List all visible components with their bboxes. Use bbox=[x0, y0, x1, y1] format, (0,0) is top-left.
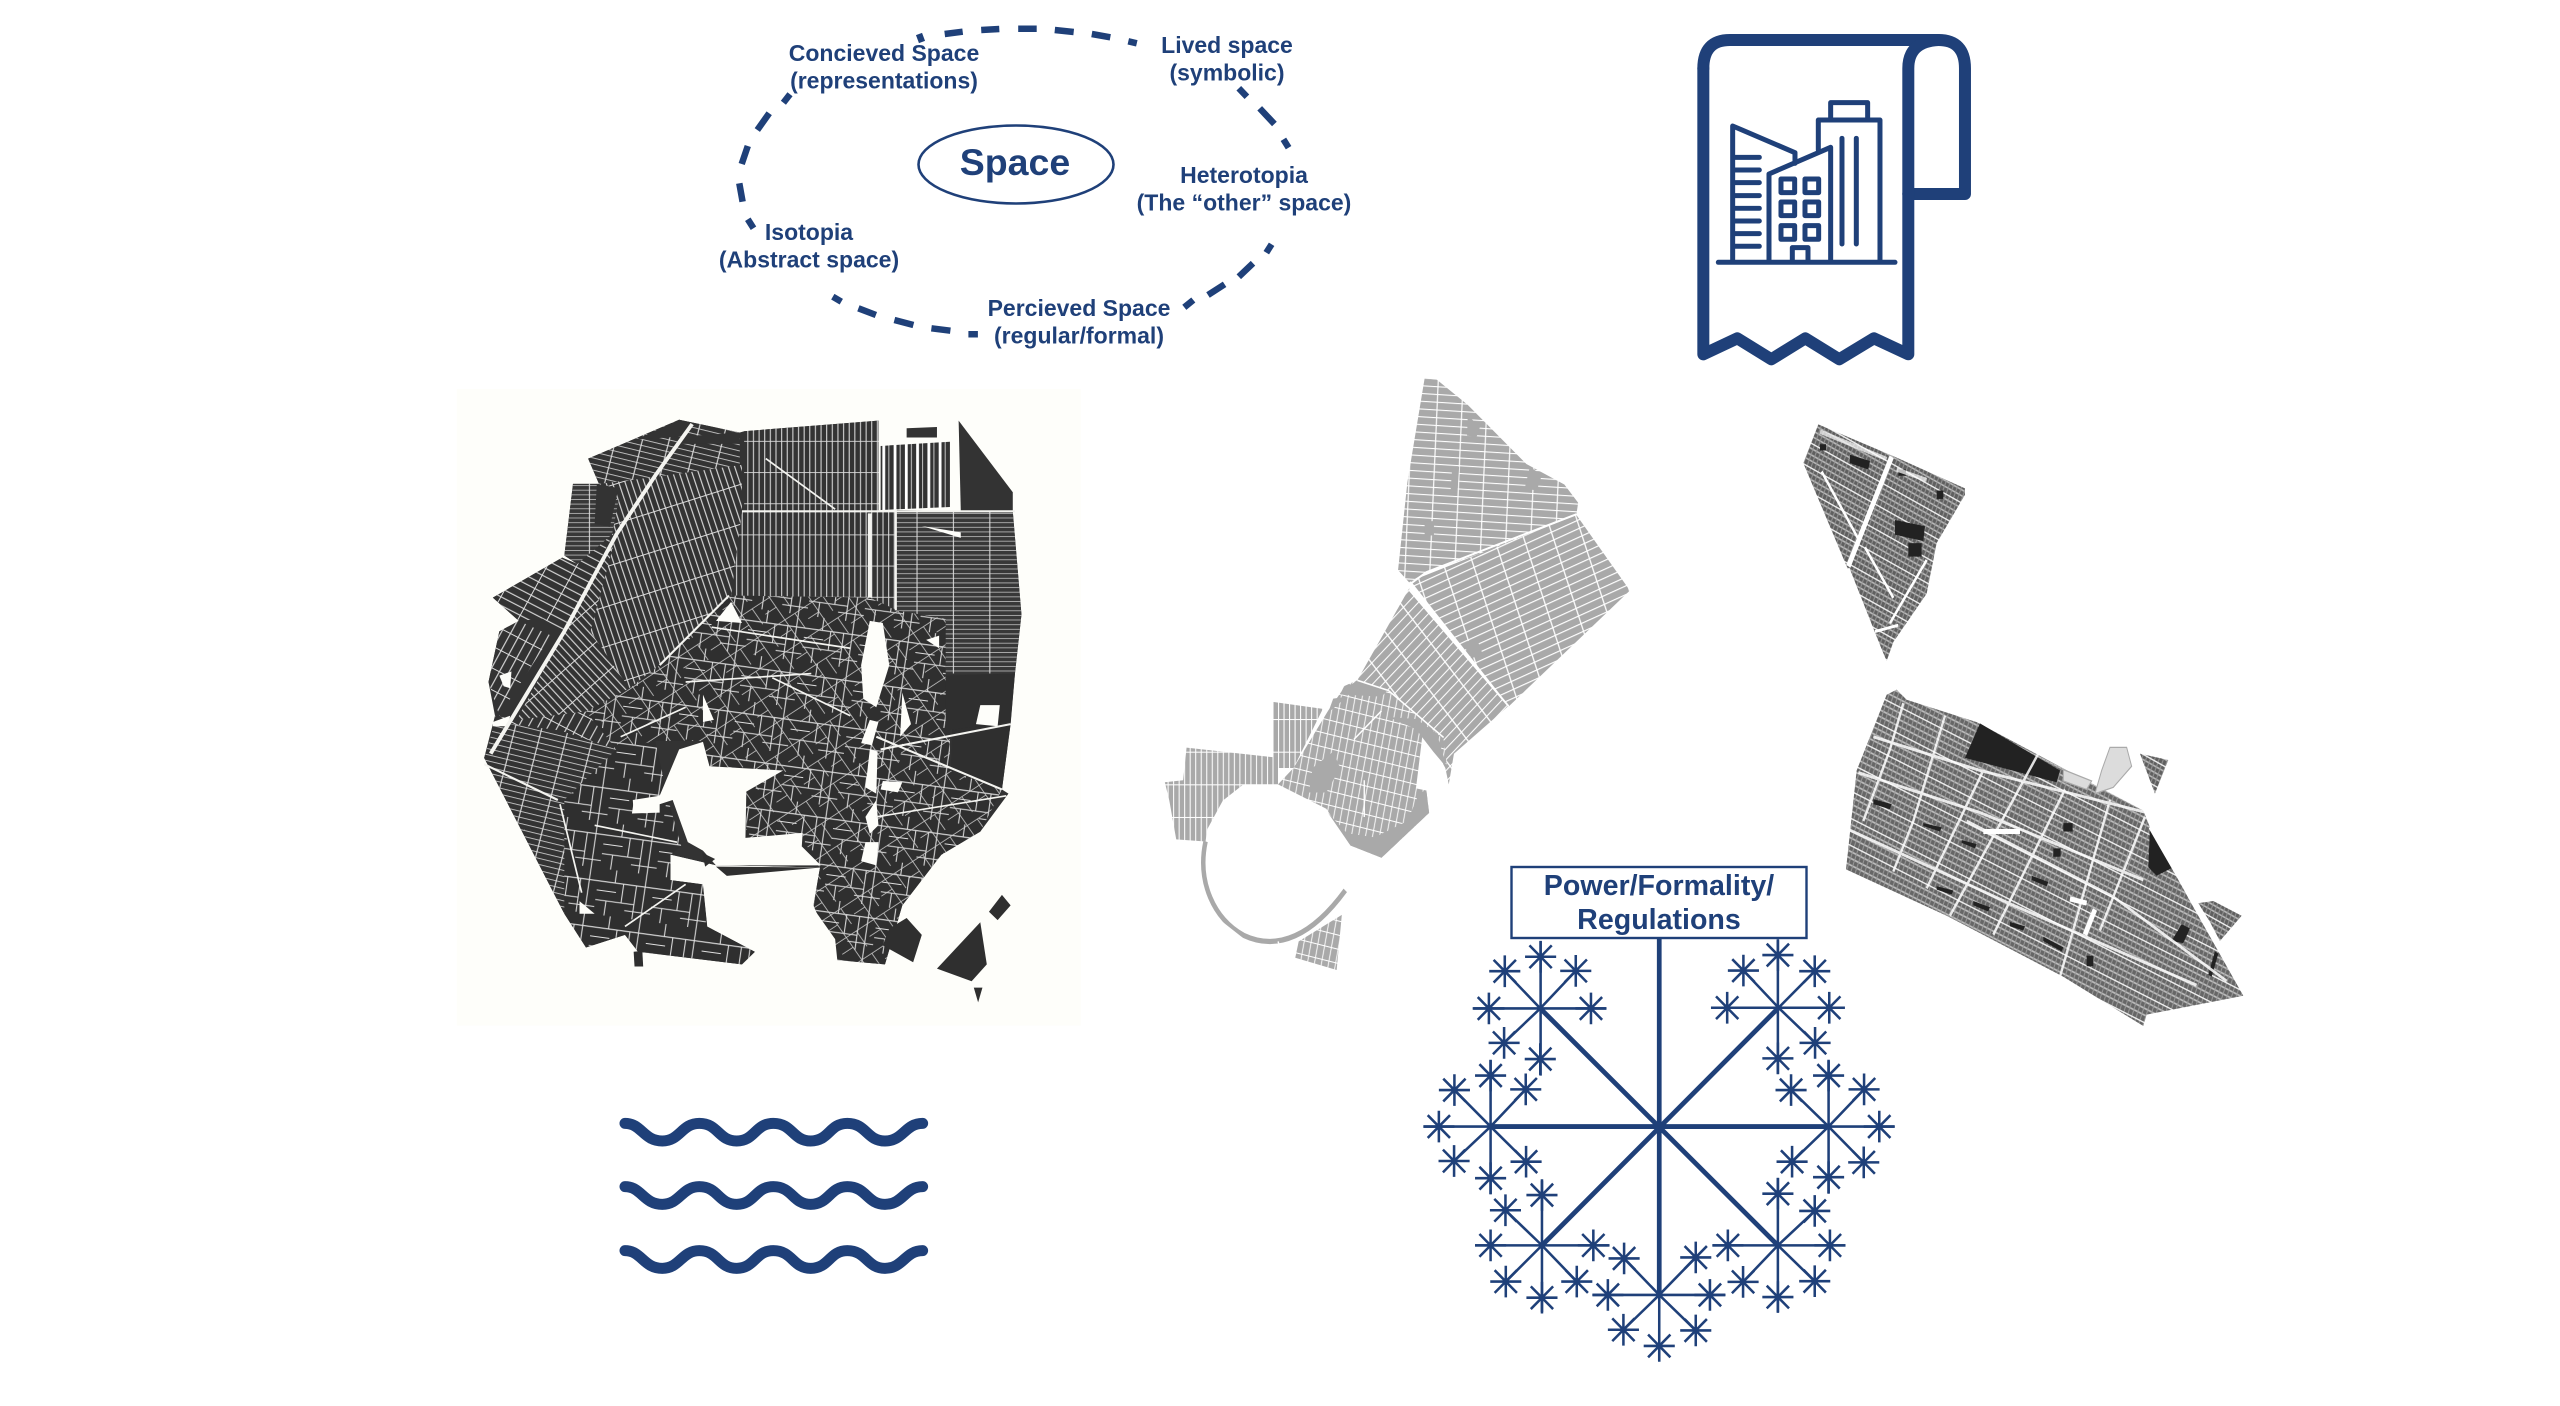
far west blocks bbox=[1165, 748, 1278, 841]
snowflake branches bbox=[1423, 938, 1895, 1362]
label: heterotopia: (The “other” space) bbox=[1137, 190, 1351, 216]
main roads bbox=[484, 424, 1015, 926]
heading box bbox=[1512, 867, 1806, 938]
map: dark figure-ground plan on cream panel bbox=[457, 389, 1081, 1026]
branch: upper left bbox=[1473, 941, 1607, 1076]
central ellipse: Space: Space bbox=[960, 141, 1070, 183]
branch: upper right bbox=[1711, 939, 1845, 1074]
label: lived space: Lived space bbox=[1161, 32, 1293, 58]
icon: water waves bbox=[625, 1123, 923, 1268]
label: isotopia: (Abstract space) bbox=[719, 246, 899, 272]
icon: scroll with city buildings bbox=[1703, 40, 1965, 359]
label: conceived space: (representations) bbox=[790, 68, 978, 94]
white road grid bbox=[1848, 703, 2227, 985]
branch: left bbox=[1423, 1060, 1542, 1194]
southern wedge bbox=[1295, 915, 1342, 970]
heading box: Power/Formality/ bbox=[1544, 870, 1774, 902]
boulevards bbox=[1354, 514, 1576, 817]
dark park bbox=[1965, 723, 2060, 782]
middle district bbox=[1411, 515, 1630, 706]
label: lived space: (symbolic) bbox=[1169, 60, 1285, 86]
heading box: Regulations bbox=[1577, 904, 1741, 936]
south district bbox=[1344, 588, 1508, 784]
central void bbox=[633, 742, 821, 865]
lake wedge bbox=[702, 853, 715, 867]
trunk spokes bbox=[1491, 938, 1829, 1295]
label: perceived space: Percieved Space bbox=[988, 295, 1170, 321]
causeway bar bbox=[716, 867, 821, 876]
branch: bottom bbox=[1592, 1242, 1725, 1362]
branch: lower left bbox=[1475, 1179, 1610, 1314]
detached east fragment bbox=[2198, 901, 2242, 941]
label: conceived space: Concieved Space bbox=[789, 40, 979, 66]
cream panel bbox=[457, 389, 1081, 1026]
city blocks bbox=[484, 420, 1021, 964]
branch: right bbox=[1776, 1060, 1895, 1194]
label: heterotopia: Heterotopia bbox=[1180, 162, 1308, 188]
ring interior bbox=[1223, 920, 1328, 952]
western blocks bbox=[1273, 702, 1323, 768]
map: small triangular district bbox=[1803, 424, 1965, 661]
diagram: power/formality/regulations snowflake bbox=[1423, 867, 1895, 1362]
central ellipse: Space bbox=[918, 126, 1114, 204]
white roads bbox=[1820, 432, 1927, 657]
label: perceived space: (regular/formal) bbox=[994, 322, 1164, 348]
solid banks bbox=[1309, 415, 1542, 858]
map: large dark-textured district bbox=[1846, 690, 2243, 1026]
branch: lower right bbox=[1712, 1178, 1845, 1313]
detached triangle bbox=[2140, 754, 2168, 794]
dark patches bbox=[1873, 799, 2218, 977]
large dark block bbox=[1895, 520, 1925, 541]
detached fragments bbox=[634, 895, 1011, 1002]
concept diagram: space bbox=[719, 29, 1351, 348]
ring promenade bbox=[1203, 841, 1345, 941]
dashed ellipse around labels bbox=[739, 29, 1289, 334]
open spaces bbox=[493, 526, 1000, 914]
north district bbox=[1398, 378, 1578, 582]
small dark blocks bbox=[1820, 444, 1943, 557]
map: grey plan with ring-shaped waterfront bbox=[1165, 378, 1630, 970]
label: isotopia: Isotopia bbox=[765, 219, 853, 245]
old core bbox=[1278, 688, 1447, 858]
light parcels bbox=[2063, 747, 2132, 794]
dark lake corner bbox=[2148, 827, 2173, 876]
